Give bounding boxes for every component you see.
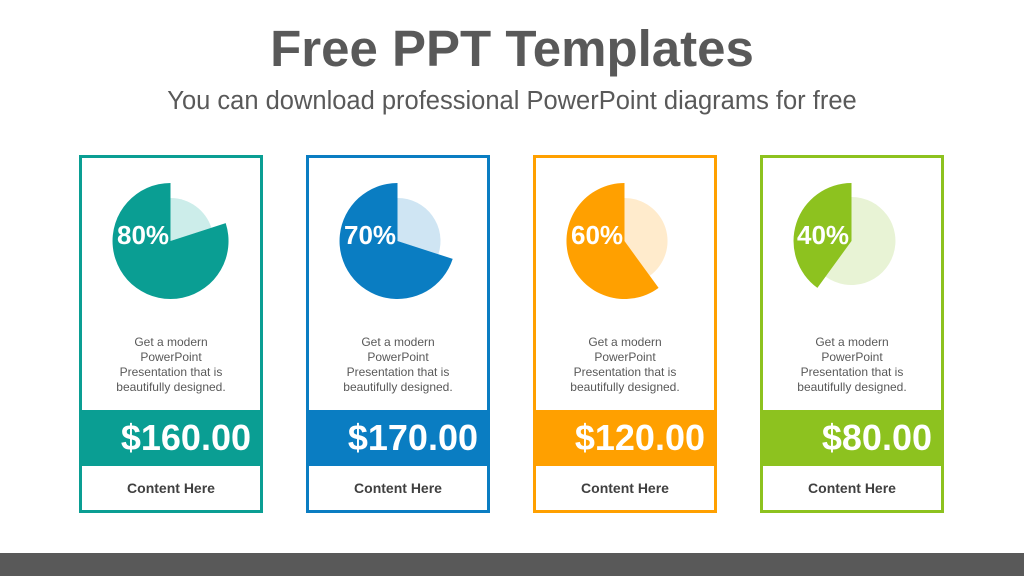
price 3: $120.00: [575, 417, 705, 458]
description 2: [343, 335, 453, 394]
card 3: [533, 155, 717, 513]
description 4: beautifully designed.: [797, 380, 907, 394]
price 3: [536, 410, 714, 466]
title: Free PPT Templates: [270, 20, 754, 77]
description 3: Presentation that is: [574, 365, 676, 379]
pie 60%: [566, 183, 668, 299]
description 3: Get a modern: [588, 335, 662, 349]
price 4: [763, 410, 941, 466]
description 3: beautifully designed.: [570, 380, 680, 394]
content label 2: Content Here: [354, 480, 442, 496]
description 1: PowerPoint: [140, 350, 202, 364]
description 1: Get a modern: [134, 335, 208, 349]
description 2: Presentation that is: [347, 365, 449, 379]
price 1: $160.00: [121, 417, 251, 458]
price 2: $170.00: [348, 417, 478, 458]
description 1: Presentation that is: [120, 365, 222, 379]
price 2: [309, 410, 487, 466]
price 4: $80.00: [822, 417, 932, 458]
description 3: PowerPoint: [594, 350, 656, 364]
description 4: Presentation that is: [801, 365, 903, 379]
card 4: [760, 155, 944, 513]
card 1: [79, 155, 263, 513]
content label 3: Content Here: [581, 480, 669, 496]
description 2: Get a modern: [361, 335, 435, 349]
description 2: PowerPoint: [367, 350, 429, 364]
pie 80%: [113, 183, 229, 299]
bottom bar: [0, 553, 1024, 576]
pie 80%: 80%: [117, 220, 169, 250]
description 1: beautifully designed.: [116, 380, 226, 394]
subtitle: You can download professional PowerPoint diagrams for free: [167, 87, 857, 115]
description 1: [116, 335, 226, 394]
description 4: PowerPoint: [821, 350, 883, 364]
description 4: [797, 335, 907, 394]
description 4: Get a modern: [815, 335, 889, 349]
description 3: [570, 335, 680, 394]
pie 40%: [794, 183, 895, 288]
pie 70%: [340, 183, 453, 299]
description 2: beautifully designed.: [343, 380, 453, 394]
card 2: [306, 155, 490, 513]
pie 40%: 40%: [797, 220, 849, 250]
price 1: [82, 410, 260, 466]
pie 60%: 60%: [571, 220, 623, 250]
content label 4: Content Here: [808, 480, 896, 496]
pie 70%: 70%: [344, 220, 396, 250]
content label 1: Content Here: [127, 480, 215, 496]
